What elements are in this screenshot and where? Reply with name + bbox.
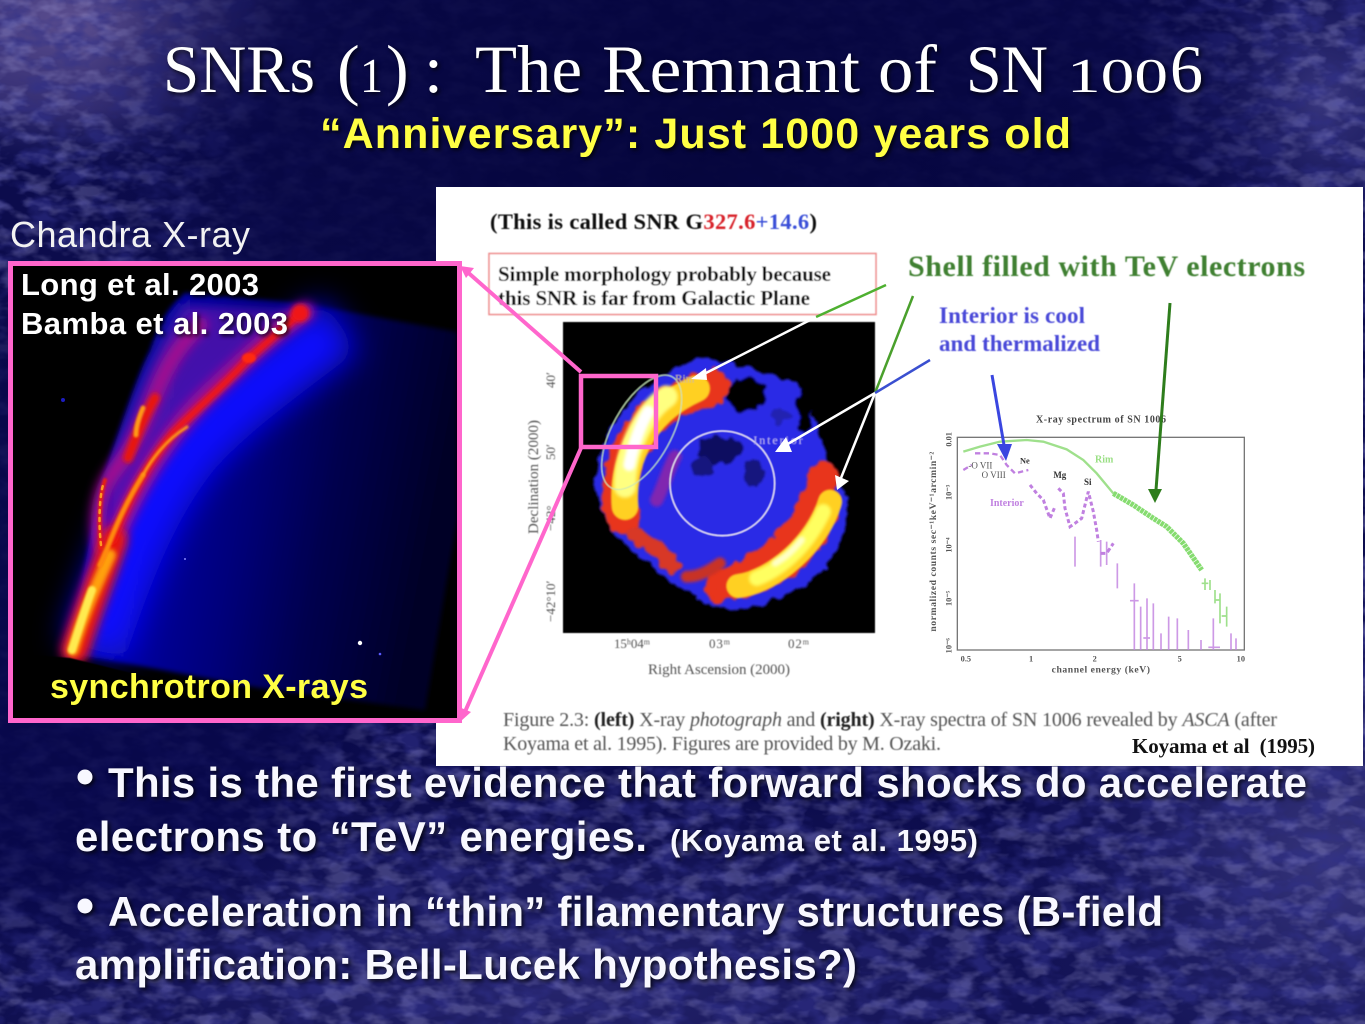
heading: shell electrons: Shell filled with TeV electrons xyxy=(908,250,1305,283)
title: SNRs xyxy=(163,31,315,107)
zoom box on remnant xyxy=(581,376,656,447)
citation labels: Bamba et al. 2003 xyxy=(21,306,288,341)
chart: X-ray spectrum of SN 1006 xyxy=(928,415,1245,676)
remnant map: Interior xyxy=(753,433,803,447)
title: 6 xyxy=(1170,31,1203,107)
note: interior: Interior is cool xyxy=(939,303,1085,328)
map labels: Rim xyxy=(675,373,695,385)
axis labels: 02ᵐ xyxy=(788,636,810,651)
subtitle: “Anniversary”: Just 1000 years old xyxy=(320,110,1071,158)
bullet text 1: (Koyama et al. 1995) xyxy=(670,823,978,858)
image: Chandra X-ray map of shell xyxy=(13,266,457,722)
bullet text 1 xyxy=(75,759,1307,860)
axes labels: 0.5 xyxy=(961,654,971,663)
black wedge below the image edge xyxy=(53,656,132,681)
title: : xyxy=(424,31,443,107)
bullet text 2: amplification: Bell-Lucek hypothesis?) xyxy=(75,941,857,988)
panel: Koyama et al. figure on white xyxy=(436,187,1363,766)
Rim spectrum xyxy=(963,440,1227,627)
caption: figure 2.3: Koyama et al. 1995). Figures are provided by M. Ozaki. xyxy=(503,733,941,755)
axes labels: 2 xyxy=(1093,654,1097,663)
arrow: interior to spectrum xyxy=(992,375,1012,461)
pink zoom arrow: upper xyxy=(460,266,581,372)
spectrum labels: Ne xyxy=(1020,456,1030,465)
title xyxy=(163,31,1203,107)
caption: figure 2.3 xyxy=(503,709,1277,755)
arrow: shell to NW rim xyxy=(691,285,886,380)
spectrum labels: Mg xyxy=(1053,470,1067,480)
axis labels: Right Ascension (2000) xyxy=(648,662,790,678)
bullet text 1: electrons to “TeV” energies. xyxy=(75,813,647,860)
title: SN xyxy=(966,31,1048,107)
callout: simple morphology xyxy=(489,254,876,314)
pink frame xyxy=(10,264,460,720)
title: of xyxy=(878,31,937,107)
reference: Koyama et al 1995: Koyama et al (1995) xyxy=(1132,734,1315,758)
bullet text 2 xyxy=(75,888,1163,988)
white panel background xyxy=(436,187,1363,766)
citation labels: Long et al. 2003 xyxy=(21,267,259,302)
caption: synchrotron X-rays: synchrotron X-rays xyxy=(50,668,368,706)
axis labels: −42° xyxy=(543,505,558,531)
bullet text 1: This is the first evidence that forward shocks do accelerate xyxy=(108,759,1307,806)
interior circle xyxy=(670,431,775,536)
chart: X-ray spectrum of SN 1006: Interior xyxy=(990,498,1024,509)
arrow: shell to spectrum xyxy=(1148,303,1170,503)
axis labels: 40′ xyxy=(543,372,558,388)
note: interior: and thermalized xyxy=(939,331,1100,356)
axis labels: 03ᵐ xyxy=(709,636,731,651)
title: ( xyxy=(337,31,360,107)
note: SNR name: (This is called SNR G327.6+14.6) xyxy=(490,209,817,234)
axis labels xyxy=(526,372,810,678)
axis labels: 15ʰ04ᵐ xyxy=(614,636,651,651)
heading: Chandra X-ray: Chandra X-ray xyxy=(10,214,250,255)
point sources xyxy=(61,398,381,655)
chart: X-ray photograph of SN 1006 xyxy=(526,322,875,678)
pink zoom arrow: lower xyxy=(459,448,581,721)
callout: simple morphology: this SNR is far from Galactic Plane xyxy=(498,286,810,310)
axis labels: 50′ xyxy=(543,444,558,460)
axes labels: 10⁻³ xyxy=(945,484,954,500)
blue glow beside filament xyxy=(95,325,340,650)
spectrum labels: Si xyxy=(1084,477,1092,487)
remnant map xyxy=(585,358,848,610)
axes labels: 10⁻⁶ xyxy=(945,638,954,653)
arrow: shell to SE rim xyxy=(835,296,913,490)
Interior spectrum xyxy=(963,453,1236,650)
axes labels: 1 xyxy=(1029,654,1033,663)
rim ellipse xyxy=(600,374,683,490)
title: 1 xyxy=(360,48,383,103)
series labels: Rim xyxy=(1095,454,1114,465)
caption: figure 2.3: Figure 2.3: (left) X-ray photograph and (right) X-ray spectra of SN 1006 revealed by ASCA (after xyxy=(503,709,1277,731)
title: 100 xyxy=(1067,48,1168,103)
axes labels: 10⁻⁴ xyxy=(945,537,954,553)
axis labels: Declination (2000) xyxy=(526,420,542,534)
spectrum labels: -O VII xyxy=(968,461,992,471)
title: The xyxy=(475,31,582,107)
axes labels: 10 xyxy=(1237,654,1245,663)
axes labels: 0.01 xyxy=(945,432,954,447)
note: interior xyxy=(939,303,1100,356)
axes labels: 5 xyxy=(1178,654,1182,663)
spectrum labels xyxy=(968,456,1092,487)
title: Remnant xyxy=(602,31,860,107)
plot field xyxy=(563,322,875,633)
spectrum labels: O VIII xyxy=(982,470,1006,480)
plot frame xyxy=(957,437,1244,650)
callout: simple morphology: Simple morphology probably because xyxy=(498,262,831,286)
citation labels xyxy=(21,267,288,341)
axes labels: 10⁻⁵ xyxy=(945,590,954,606)
panel: Chandra X-ray xyxy=(10,214,460,722)
arrow: interior to circle xyxy=(775,360,930,452)
filaments xyxy=(72,304,309,650)
bullet text 2: Acceleration in “thin” filamentary structures (B-field xyxy=(108,888,1163,935)
chart title: X-ray spectrum of SN 1006 xyxy=(1036,415,1166,426)
axes labels: normalized counts sec⁻¹keV⁻¹arcmin⁻² xyxy=(928,452,939,632)
axes labels: channel energy (keV) xyxy=(1052,665,1150,676)
axis labels: −42°10′ xyxy=(543,580,558,622)
axes labels xyxy=(928,432,1245,676)
title: ) xyxy=(386,31,409,107)
